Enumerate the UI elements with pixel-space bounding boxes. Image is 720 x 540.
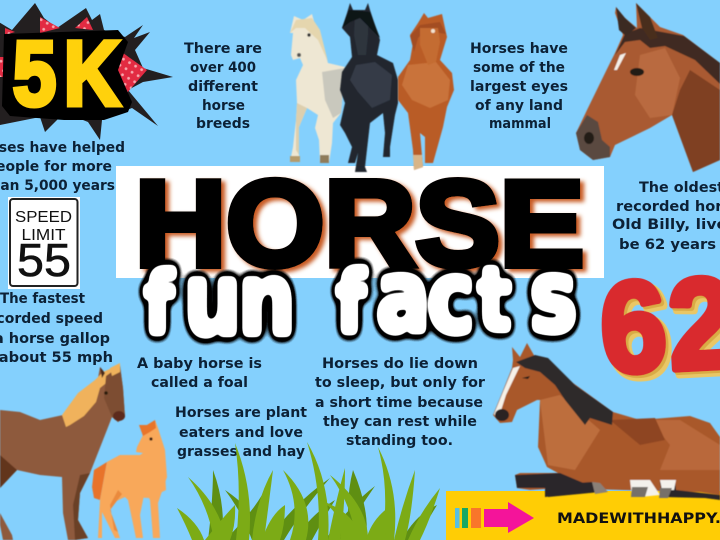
text: fastest speed fact: The fastest bbox=[0, 291, 85, 307]
text: sleep fact bbox=[315, 356, 485, 449]
icon: comic burst with 5K bbox=[0, 3, 173, 140]
text: foal fact: A baby horse is bbox=[137, 356, 262, 372]
icon: horse head portrait bbox=[576, 3, 720, 172]
text: 5,000 years fact bbox=[0, 140, 125, 194]
text: sleep fact: Horses do lie down bbox=[322, 356, 478, 372]
text: 400 breeds fact: different bbox=[188, 79, 258, 95]
panel: yellow website banner bbox=[446, 491, 720, 540]
text: largest eyes fact: mammal bbox=[489, 116, 551, 132]
panel: title white box bbox=[116, 166, 604, 278]
icon: speed limit 55 sign: 55 bbox=[17, 234, 71, 286]
icon: black horse bbox=[340, 3, 398, 172]
heading: fun facts: n bbox=[238, 242, 295, 358]
text: largest eyes fact: some of the bbox=[473, 60, 565, 76]
icon: comic burst with 5K: 5K bbox=[13, 23, 120, 125]
text: sleep fact: a short time because bbox=[315, 395, 483, 411]
text: 400 breeds fact: There are bbox=[184, 41, 262, 57]
text: sleep fact: to sleep, but only for bbox=[315, 375, 485, 391]
icon: grass tuft bbox=[177, 442, 440, 540]
icon: speed limit 55 sign bbox=[8, 197, 80, 289]
icon: speed limit 55 sign: LIMIT bbox=[22, 227, 66, 244]
text: largest eyes fact: largest eyes bbox=[470, 79, 568, 95]
text: plant eaters fact: eaters and love bbox=[179, 425, 303, 441]
text: largest eyes fact: Horses have bbox=[470, 41, 568, 57]
icon: adult brown horse bbox=[0, 363, 125, 540]
text: largest eyes fact: of any land bbox=[475, 98, 563, 114]
heading: fun facts: u bbox=[184, 242, 241, 358]
heading: fun facts: s bbox=[530, 239, 577, 355]
icon: colour stripes and pink arrow bbox=[455, 502, 534, 533]
text: 400 breeds fact: over 400 bbox=[190, 60, 256, 76]
heading: fun facts: t bbox=[478, 248, 511, 351]
text: foal fact bbox=[137, 356, 262, 391]
text: plant eaters fact: Horses are plant bbox=[175, 405, 307, 421]
heading: fun facts: c bbox=[427, 240, 475, 356]
text: largest eyes fact bbox=[470, 41, 568, 132]
text: foal fact: called a foal bbox=[151, 375, 248, 391]
heading: fun facts: a bbox=[376, 239, 430, 355]
heading: fun facts: f bbox=[336, 254, 367, 353]
text: 400 breeds fact: breeds bbox=[196, 116, 250, 132]
heading: fun facts: f bbox=[144, 255, 175, 354]
text: oldest horse fact: The oldest bbox=[639, 180, 720, 196]
text: plant eaters fact bbox=[175, 405, 307, 460]
text: 400 breeds fact: horse bbox=[202, 98, 245, 114]
text: 400 breeds fact bbox=[184, 41, 262, 132]
icon: chestnut horse bbox=[398, 13, 454, 170]
icon: white horse bbox=[290, 14, 345, 163]
text: sleep fact: standing too. bbox=[346, 433, 453, 449]
icon: lying bay horse bbox=[493, 343, 720, 500]
text: plant eaters fact: grasses and hay bbox=[177, 444, 305, 460]
heading: HORSE: HORSE bbox=[135, 156, 584, 292]
text: fastest speed fact bbox=[0, 291, 113, 366]
text: sleep fact: they can rest while bbox=[323, 414, 477, 430]
text: oldest horse fact bbox=[612, 180, 720, 253]
icon: orange foal bbox=[92, 420, 167, 538]
icon: speed limit 55 sign: SPEED bbox=[15, 209, 72, 226]
